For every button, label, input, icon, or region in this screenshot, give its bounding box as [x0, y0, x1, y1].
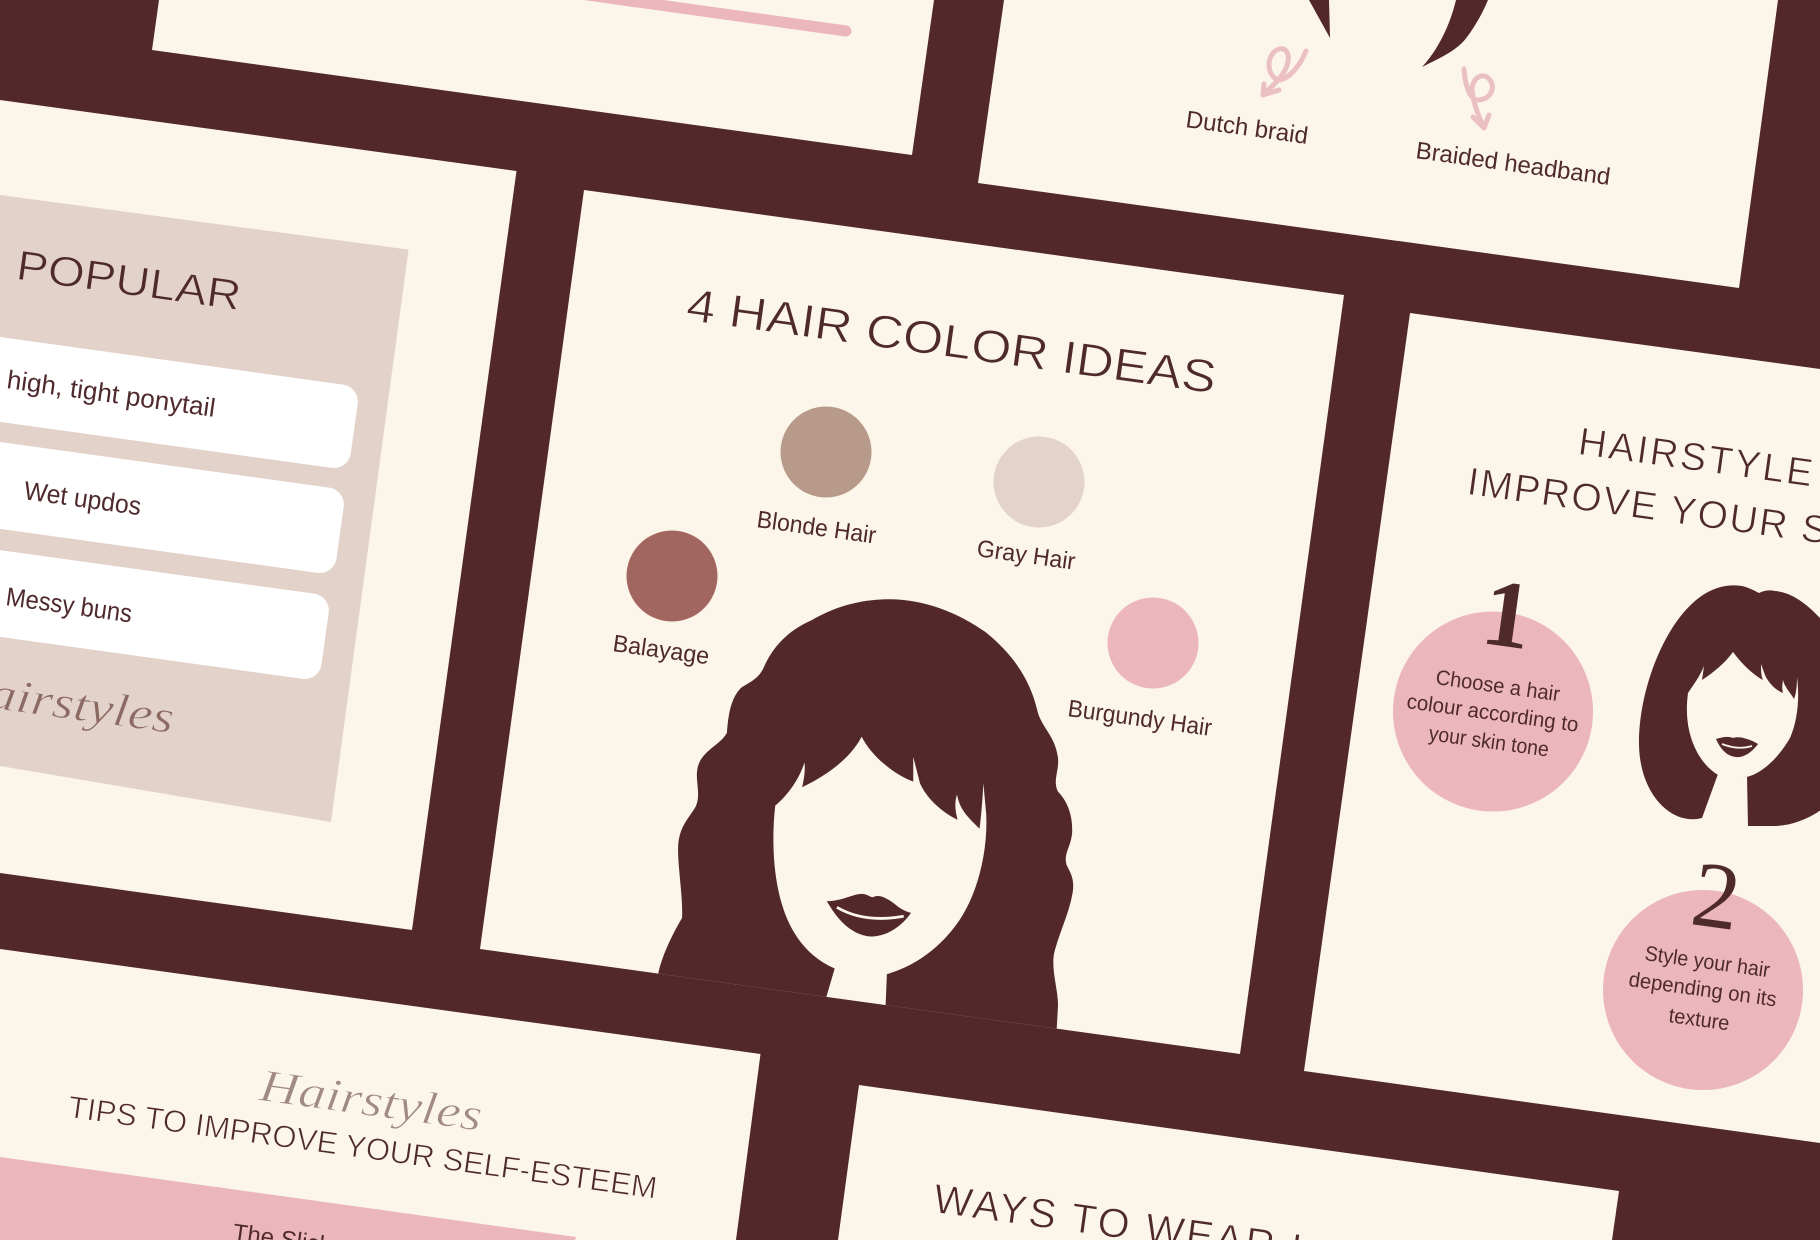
label: balayage: Balayage: [611, 630, 711, 670]
hair fragment right: [1422, 0, 1488, 67]
script: hairstyles: Hairstyles: [255, 1059, 486, 1141]
tip 2 text: [1627, 942, 1778, 1035]
panel: top-left slide: [152, 0, 934, 155]
text: wet updos: Wet updos: [22, 475, 143, 521]
text: high tight ponytail: high, tight ponytail: [5, 364, 217, 423]
inner taupe card: [0, 195, 409, 822]
title: tips: TIPS TO IMPROVE YOUR SELF-ESTEEM: [66, 1089, 659, 1206]
title line 1: HAIRSTYLE: [1576, 420, 1818, 496]
arrow: Braided headband: [1464, 69, 1492, 128]
panel: self-esteem tips slide: [1304, 313, 1820, 1143]
tip 2 text: depending on its: [1627, 968, 1778, 1011]
text: messy buns: Messy buns: [4, 581, 134, 628]
swatch: blonde: [780, 406, 872, 498]
illustration: woman with wavy hair: [648, 599, 1073, 1055]
panel: hair color ideas slide: [480, 190, 1344, 1055]
label: burgundy hair: Burgundy Hair: [1066, 695, 1214, 742]
pink bar: [530, 0, 846, 31]
number 2: 2: [1686, 842, 1747, 951]
panel: ways to wear slide: [838, 1085, 1619, 1240]
panel: braid styles slide: [978, 0, 1778, 288]
swatch: balayage: [626, 530, 718, 622]
tip 2 text: Style your hair: [1643, 942, 1771, 982]
label: blonde hair: Blonde Hair: [755, 506, 878, 549]
tip 2 text: texture: [1667, 1004, 1731, 1035]
label: Dutch braid: Dutch braid: [1184, 106, 1310, 150]
panel: popular hairstyles slide: [0, 100, 516, 930]
title: 4 hair color ideas: 4 HAIR COLOR IDEAS: [684, 278, 1220, 403]
heading: popular: POPULAR: [14, 241, 244, 319]
tip 1 text: colour according to: [1405, 690, 1580, 737]
tip circle 1: [1393, 558, 1593, 812]
swatch: gray: [994, 436, 1084, 528]
hair fragment left: [1309, 0, 1330, 38]
number 1: 1: [1476, 558, 1539, 670]
arrow: Dutch braid: [1263, 49, 1306, 95]
illustration: woman with bob hair: [1639, 585, 1820, 826]
label: gray hair: Gray Hair: [975, 535, 1077, 576]
panel: tips to improve self-esteem slide: [0, 949, 760, 1240]
swatch: burgundy: [1108, 598, 1198, 688]
row: messy buns: [0, 511, 331, 681]
pink band: [0, 1157, 576, 1240]
tip 1 text: Choose a hair: [1434, 666, 1561, 706]
row: high tight ponytail: [0, 302, 360, 470]
tip 1 text: [1405, 666, 1580, 762]
tip 1 text: your skin tone: [1427, 722, 1550, 762]
tip circle 2: [1603, 842, 1803, 1090]
row: wet updos: [0, 405, 346, 575]
label: Braided headband: Braided headband: [1414, 137, 1612, 191]
